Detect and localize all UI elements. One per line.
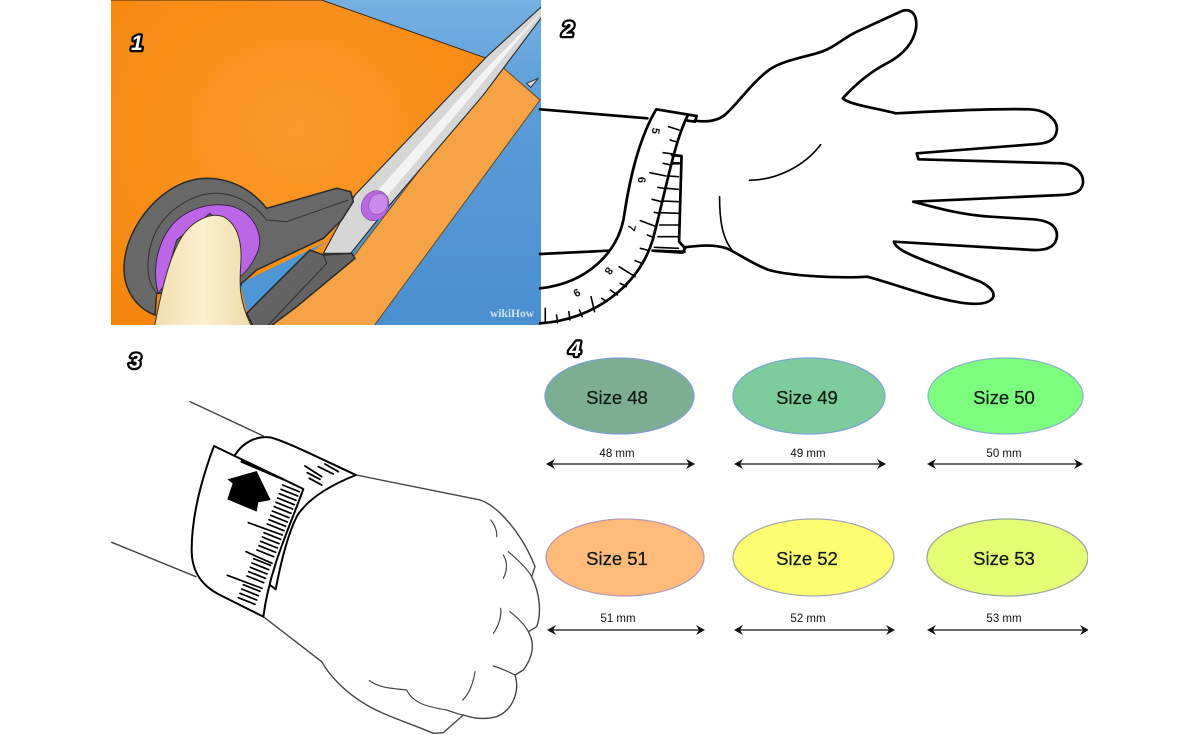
size 50 oval	[928, 358, 1083, 434]
fist outline	[263, 475, 539, 733]
size 49 oval: Size 49	[776, 387, 838, 408]
size 52 oval: Size 52	[776, 548, 838, 569]
step number 3: 3	[129, 350, 141, 373]
forearm lines	[112, 402, 263, 577]
49 mm dimension	[734, 448, 886, 469]
palm creases	[720, 145, 821, 250]
50 mm dimension	[927, 448, 1083, 469]
tape numbers: 5	[649, 127, 661, 135]
size 51 oval	[546, 519, 704, 596]
lighter folded paper strip	[267, 65, 540, 327]
scissor blade tip behind paper	[527, 78, 538, 87]
tape tick marks	[545, 127, 679, 323]
tape tick marks	[227, 485, 299, 604]
step number 1: 1	[131, 32, 143, 55]
panel 3: fist with tape wrapped on the wrist	[112, 402, 539, 733]
purple grip ring	[155, 205, 260, 293]
tape end piece	[653, 155, 685, 253]
lower scissor handle	[247, 250, 355, 327]
52 mm dimension: 52 mm	[790, 613, 826, 625]
51 mm dimension: 51 mm	[600, 613, 636, 625]
size 48 oval: Size 48	[586, 387, 648, 408]
52 mm dimension	[734, 613, 895, 635]
48 mm dimension	[546, 448, 695, 469]
size 52 oval	[733, 519, 894, 596]
53 mm dimension	[927, 613, 1089, 635]
blue background	[323, 0, 541, 325]
tape back band	[235, 437, 356, 589]
scissor blade highlight	[378, 13, 540, 196]
measuring tape strip	[540, 109, 697, 323]
scissor blade	[323, 5, 543, 253]
tape upper tick marks	[305, 464, 338, 485]
tape numbers: 8	[602, 264, 615, 276]
tape front flap	[192, 446, 303, 617]
handle inner contour	[148, 193, 348, 293]
step number 2: 2	[561, 18, 574, 41]
53 mm dimension: 53 mm	[986, 613, 1022, 625]
hand contour	[684, 10, 1083, 304]
49 mm dimension: 49 mm	[790, 448, 826, 460]
tape numbers: 9	[571, 285, 582, 299]
tape edge marker line	[242, 462, 283, 479]
51 mm dimension	[547, 613, 705, 635]
size 48 oval	[545, 358, 694, 434]
size 53 oval: Size 53	[973, 548, 1035, 569]
scissor pivot screw	[360, 190, 390, 221]
48 mm dimension: 48 mm	[599, 448, 635, 460]
arrow icon pointing to the mark	[227, 471, 271, 512]
hand outline with wrist	[540, 10, 1083, 323]
tape numbers	[571, 127, 661, 299]
orange paper sheet	[110, 0, 487, 327]
knuckle lines	[369, 520, 532, 715]
infographic canvas	[111, 0, 1088, 734]
size 51 oval: Size 51	[586, 548, 648, 569]
wikiHow watermark: wikiHow	[490, 308, 535, 320]
panel 1: cutting the paper strip with scissors	[110, 0, 545, 327]
size 49 oval	[733, 358, 885, 434]
panel 2: hand with measuring tape	[540, 10, 1083, 323]
50 mm dimension: 50 mm	[986, 448, 1022, 460]
blue gap between handles	[240, 242, 327, 312]
upper scissor handle	[124, 178, 353, 315]
step number 4: 4	[568, 338, 581, 361]
size 50 oval: Size 50	[973, 387, 1035, 408]
finger through the handle	[154, 215, 252, 327]
tape numbers: 6	[635, 177, 647, 183]
forearm lines	[540, 109, 684, 254]
size 53 oval	[927, 519, 1088, 596]
tape numbers: 7	[624, 223, 638, 232]
panel 4: size chart	[545, 358, 1089, 635]
lower handle ridge	[268, 255, 327, 325]
